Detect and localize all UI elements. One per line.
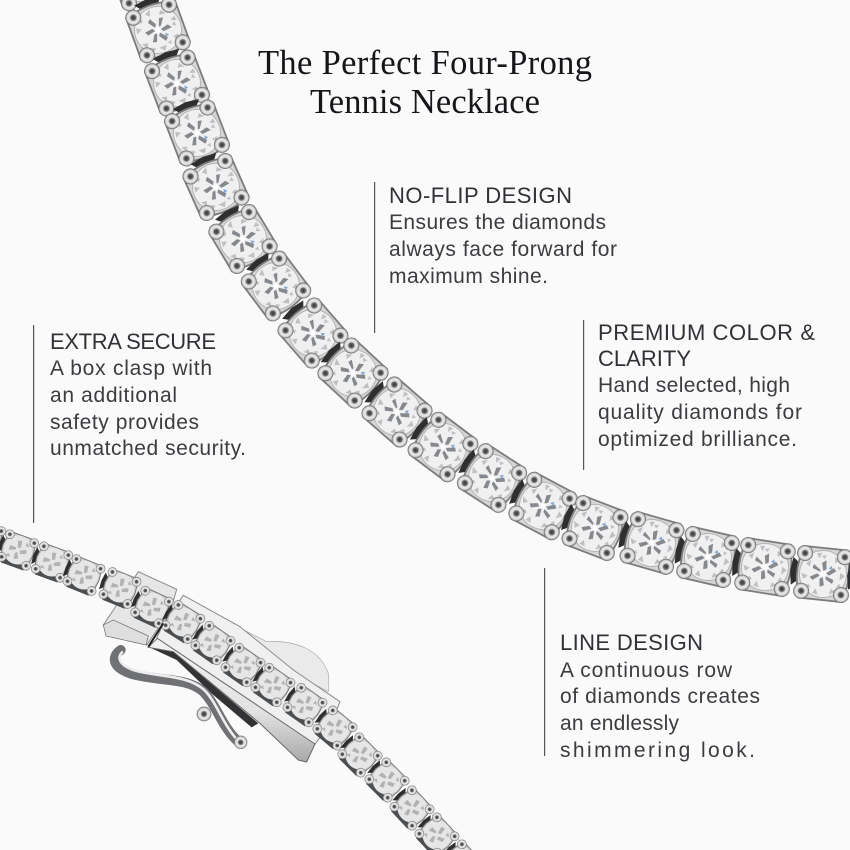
lever ball bbox=[197, 707, 211, 721]
callout: line design: an endlessly bbox=[560, 712, 680, 735]
upper necklace: curved diamond row bbox=[103, 0, 850, 607]
callout: line design bbox=[544, 568, 760, 762]
callout: extra secure bbox=[33, 325, 246, 523]
callout: premium color and clarity: PREMIUM COLOR & bbox=[598, 320, 815, 345]
callout: extra secure: A box clasp with bbox=[50, 357, 212, 380]
callout: extra secure: an additional bbox=[50, 384, 177, 407]
callout: no-flip design: always face forward for bbox=[389, 238, 617, 261]
clasp: front box and safety lever bbox=[103, 620, 315, 762]
upper plate bbox=[103, 572, 177, 645]
clasp: tab and back plates bbox=[103, 572, 340, 747]
callout: line design: shimmering look. bbox=[560, 739, 755, 762]
lever knob bbox=[234, 736, 247, 749]
left box side bbox=[103, 620, 148, 645]
callout: extra secure: EXTRA SECURE bbox=[50, 329, 216, 354]
seam bbox=[148, 623, 163, 647]
title: Tennis Necklace bbox=[310, 83, 540, 121]
front box side bbox=[148, 638, 315, 762]
callout: premium color and clarity: optimized brilliance. bbox=[598, 428, 797, 451]
title bbox=[258, 44, 592, 121]
safety lever bbox=[115, 650, 238, 742]
callout: line design: A continuous row bbox=[560, 659, 733, 682]
callout: extra secure: safety provides bbox=[50, 411, 199, 434]
callout: no-flip design: Ensures the diamonds bbox=[389, 211, 606, 234]
callout: premium color and clarity: CLARITY bbox=[598, 346, 691, 371]
callout: premium color and clarity: quality diamonds for bbox=[598, 401, 802, 424]
long plate bbox=[157, 595, 340, 747]
title: The Perfect Four-Prong bbox=[258, 44, 592, 82]
callout: line design: LINE DESIGN bbox=[560, 630, 703, 655]
callout: line design: of diamonds creates bbox=[560, 685, 760, 708]
callout: premium color and clarity: Hand selected, high bbox=[598, 374, 790, 397]
callout: no-flip design bbox=[374, 182, 617, 333]
lever highlight bbox=[120, 652, 237, 740]
thumb tab bbox=[238, 627, 328, 692]
callout: premium color and clarity bbox=[583, 320, 815, 470]
dark interior bbox=[147, 646, 258, 727]
lower bracelet: small diamond row bbox=[0, 515, 486, 850]
callout: no-flip design: NO-FLIP DESIGN bbox=[389, 183, 572, 208]
callout: extra secure: unmatched security. bbox=[50, 437, 246, 460]
callout: no-flip design: maximum shine. bbox=[389, 265, 548, 288]
